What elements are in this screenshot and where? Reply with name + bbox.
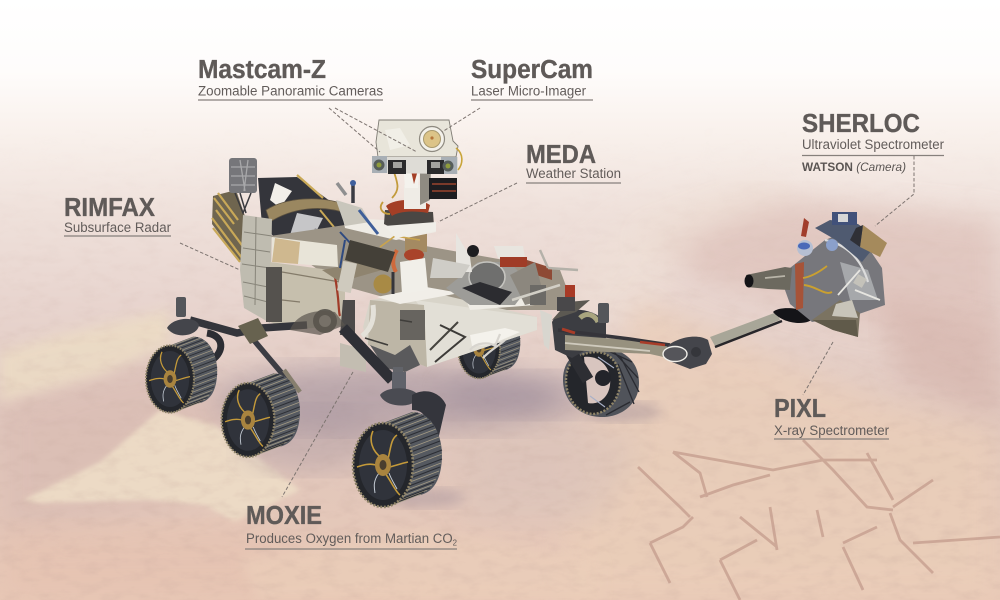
label: MOXIE: MOXIE <box>246 502 322 530</box>
hidden middle wheel <box>458 312 520 378</box>
label: SuperCam: SuperCam <box>471 56 593 84</box>
main chassis body <box>240 215 575 367</box>
label: PIXL: X-ray Spectrometer <box>774 423 889 438</box>
central column <box>405 230 427 252</box>
label: SHERLOC <box>802 110 944 174</box>
label: RIMFAX <box>64 194 171 236</box>
label: Mastcam-Z: Zoomable Panoramic Cameras <box>198 84 383 98</box>
label: SuperCam <box>471 56 593 100</box>
deck machinery <box>336 180 578 305</box>
Mastcam-Z camera bar <box>372 148 462 174</box>
arm forearm tube <box>565 335 668 358</box>
label: SHERLOC: WATSON (Camera) <box>802 162 906 174</box>
label: MEDA <box>526 141 621 183</box>
arm outer tube <box>710 312 780 346</box>
remote sensing mast <box>372 120 462 238</box>
deck behind <box>270 225 575 310</box>
label: MEDA: Weather Station <box>526 166 621 181</box>
rear RTG and sample hardware <box>212 158 352 262</box>
label: MEDA: MEDA <box>526 141 596 169</box>
MOXIE unit and front suspension <box>340 305 446 440</box>
rover illustration <box>146 120 887 507</box>
rear rocker-bogie suspension <box>167 297 345 392</box>
label: Mastcam-Z <box>198 56 383 100</box>
label: PIXL: PIXL <box>774 395 826 423</box>
red thermal parts <box>494 246 525 258</box>
red cable strip <box>795 262 804 310</box>
arm elbow joint <box>667 337 712 369</box>
label: MOXIE: 2 <box>453 538 458 548</box>
light spire and black dish <box>456 233 472 272</box>
label: RIMFAX: RIMFAX <box>64 194 155 222</box>
label: SHERLOC: SHERLOC <box>802 110 920 138</box>
label: Mastcam-Z: Mastcam-Z <box>198 56 326 84</box>
centre wheel <box>222 373 300 457</box>
leader lines <box>180 108 914 497</box>
label: MOXIE <box>245 502 458 549</box>
main front box <box>363 292 537 367</box>
robotic arm <box>558 312 782 369</box>
label: SHERLOC: Ultraviolet Spectrometer <box>802 137 944 152</box>
mechanism drum <box>446 262 530 305</box>
rear wheel <box>146 337 217 413</box>
rover shadow on ground <box>215 364 661 508</box>
underbody hardware <box>435 325 520 362</box>
right front wheel and shoulder <box>540 286 639 417</box>
label: PIXL <box>774 395 889 439</box>
rear column <box>240 215 272 323</box>
beige box top <box>272 237 338 267</box>
PIXL box <box>812 300 860 337</box>
front wheel <box>353 412 442 507</box>
label: RIMFAX: Subsurface Radar <box>64 220 171 235</box>
rover deck top bars <box>343 218 436 240</box>
side panel <box>270 262 345 330</box>
SHERLOC body <box>815 220 880 262</box>
label: MOXIE: Produces Oxygen from Martian CO <box>246 531 457 546</box>
head with SuperCam <box>376 120 458 157</box>
turret with SHERLOC and PIXL <box>744 212 887 337</box>
WATSON camera barrel <box>746 267 792 290</box>
label: SuperCam: Laser Micro-Imager <box>471 84 586 98</box>
